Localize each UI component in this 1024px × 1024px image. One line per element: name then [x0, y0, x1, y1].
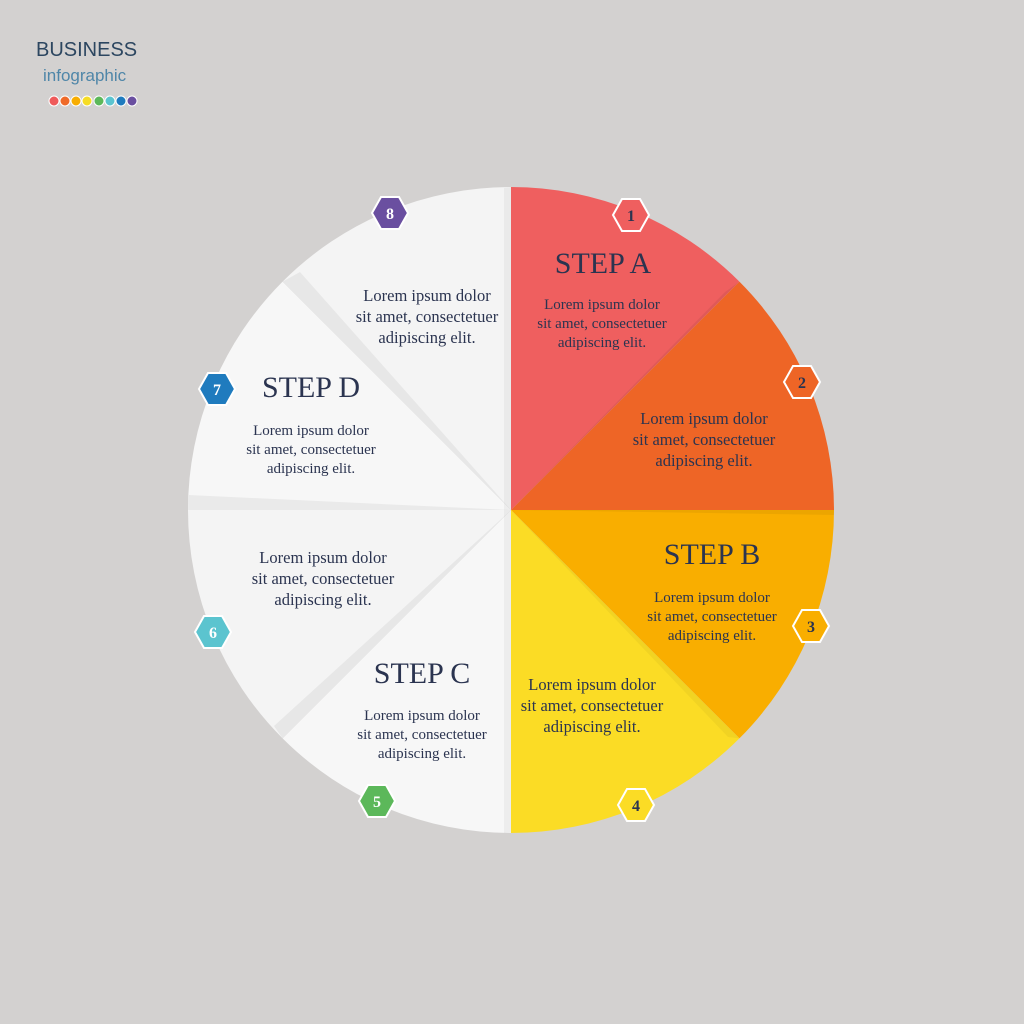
- segment 2: [511, 282, 834, 510]
- title: BUSINESS: [36, 39, 137, 61]
- segment 4: [511, 510, 739, 833]
- hexagon badges: [195, 197, 829, 821]
- title: [36, 39, 137, 106]
- step A: Lorem ipsum dolor: [544, 297, 660, 313]
- text 6: Lorem ipsum dolor: [259, 548, 387, 567]
- badge 6: 6: [209, 625, 217, 642]
- step B: sit amet, consectetuer: [647, 609, 777, 625]
- badge 7: 7: [213, 382, 221, 399]
- badge 6: [195, 616, 231, 648]
- color dots: [49, 96, 137, 106]
- text 6: adipiscing elit.: [274, 590, 372, 609]
- step D: STEP D: [262, 371, 360, 404]
- badge 8: 8: [386, 206, 394, 223]
- text 4: sit amet, consectetuer: [521, 696, 664, 715]
- step D: [246, 371, 376, 477]
- text 8: sit amet, consectetuer: [356, 307, 499, 326]
- badge 3: 3: [807, 619, 815, 636]
- step A: STEP A: [555, 247, 652, 280]
- badge 7: [199, 373, 235, 405]
- step texts: [246, 247, 777, 762]
- text 8: adipiscing elit.: [378, 328, 476, 347]
- text 2: Lorem ipsum dolor: [640, 409, 768, 428]
- segment 1: [511, 187, 739, 510]
- badge 2: 2: [798, 375, 806, 392]
- text 4: Lorem ipsum dolor: [528, 675, 656, 694]
- text 8: Lorem ipsum dolor: [363, 286, 491, 305]
- badge 5: [359, 785, 395, 817]
- step A: sit amet, consectetuer: [537, 316, 667, 332]
- step C: [357, 657, 487, 762]
- step B: adipiscing elit.: [668, 628, 756, 644]
- badge 4: 4: [632, 798, 640, 815]
- badge 2: [784, 366, 820, 398]
- text 2: adipiscing elit.: [655, 451, 753, 470]
- step A: [537, 247, 667, 351]
- text 2: sit amet, consectetuer: [633, 430, 776, 449]
- badge 8: [372, 197, 408, 229]
- title: infographic: [43, 66, 127, 85]
- step D: sit amet, consectetuer: [246, 442, 376, 458]
- text 4: adipiscing elit.: [543, 717, 641, 736]
- badge 4: [618, 789, 654, 821]
- step C: Lorem ipsum dolor: [364, 708, 480, 724]
- badge 1: 1: [627, 208, 635, 225]
- step A: adipiscing elit.: [558, 335, 646, 351]
- badge 1: [613, 199, 649, 231]
- badge 3: [793, 610, 829, 642]
- step D: adipiscing elit.: [267, 461, 355, 477]
- step B: [647, 538, 777, 644]
- step C: STEP C: [374, 657, 470, 690]
- text 6: sit amet, consectetuer: [252, 569, 395, 588]
- step C: sit amet, consectetuer: [357, 727, 487, 743]
- step B: Lorem ipsum dolor: [654, 590, 770, 606]
- badge 5: 5: [373, 794, 381, 811]
- step C: adipiscing elit.: [378, 746, 466, 762]
- step B: STEP B: [664, 538, 760, 571]
- pie chart: [188, 187, 834, 833]
- segment 3: [511, 510, 834, 738]
- step D: Lorem ipsum dolor: [253, 423, 369, 439]
